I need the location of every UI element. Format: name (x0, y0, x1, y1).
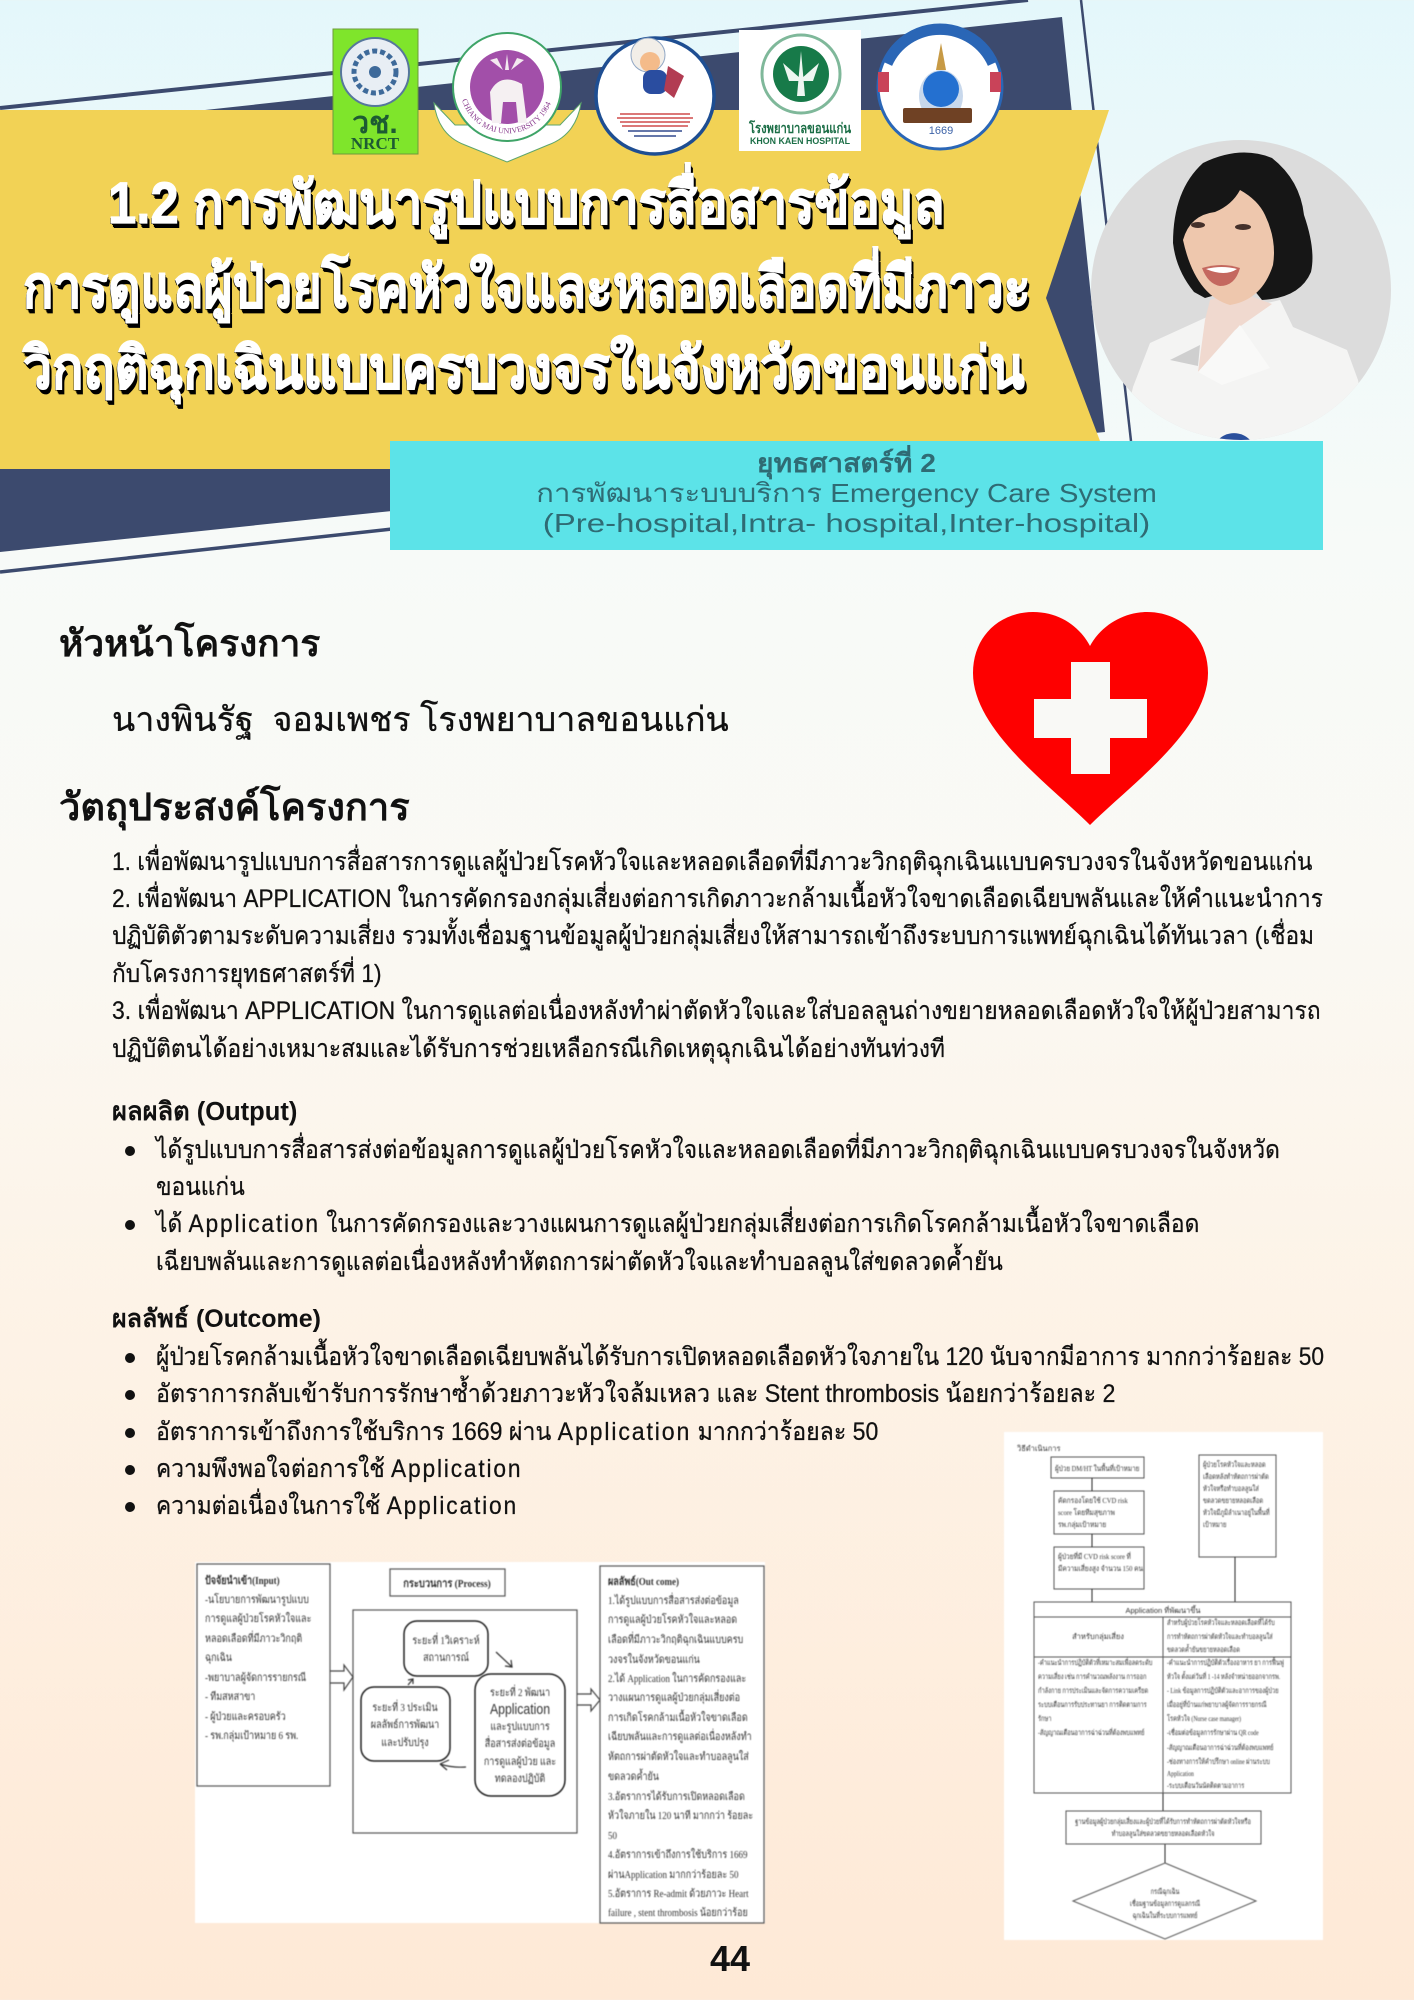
process stages: ทดลองปฏิบัติ (495, 1772, 545, 1785)
methods flowchart image: -ช่องทางการให้คำปรึกษา online ผ่านระบบ (1167, 1757, 1270, 1766)
outcome list: ความต่อเนื่องในการใช้ Application (156, 1492, 518, 1520)
methods flowchart image: ระบบเตือนการรับประทานยา การติดตามการ (1038, 1700, 1147, 1709)
input box: -นโยบายการพัฒนารูปแบบ (205, 1592, 309, 1606)
input box: การดูแลผู้ป่วยโรคหัวใจและ (205, 1611, 311, 1625)
methods flowchart image: ฐานข้อมูลผู้ป่วยกลุ่มเสี่ยงและผู้ป่วยที่ได้รับการทำหัตถการผ่าตัดหัวใจหรือ (1075, 1816, 1251, 1826)
title (22, 162, 1031, 409)
process stages: Application (490, 1701, 550, 1717)
outcome box: หัตถการผ่าตัดหัวใจและทำบอลลูนใส่ (608, 1750, 749, 1763)
outcome box: 5.อัตราการ Re-admit ด้วยภาวะ Heart (608, 1887, 749, 1900)
logo: Khon Kaen EMS foundation: 1669 (929, 125, 953, 137)
outcome list (125, 1338, 1324, 1520)
outcome box: 4.อัตราการเข้าถึงการใช้บริการ 1669 (608, 1848, 747, 1861)
strategy box (390, 441, 1323, 550)
methods flowchart image: คัดกรองโดยใช้ CVD risk (1058, 1496, 1128, 1505)
process stages: สื่อสารส่งต่อข้อมูล (485, 1735, 555, 1750)
input box: ฉุกเฉิน (205, 1651, 232, 1664)
objectives text: ปฏิบัติตนได้อย่างเหมาะสมและได้รับการช่วยเหลือกรณีเกิดเหตุฉุกเฉินได้อย่างทันท่วงที (112, 1035, 945, 1063)
methods flowchart image: รพ.กลุ่มเป้าหมาย (1058, 1521, 1106, 1529)
methods flowchart image: ความเสี่ยง เช่น การคำนวณพลังงาน การออก (1038, 1671, 1146, 1681)
outcome box: 2.ได้ Application ในการคัดกรองและ (608, 1672, 746, 1685)
title: การดูแลผู้ป่วยโรคหัวใจและหลอดเลือดที่มีภาวะ (23, 255, 1031, 320)
outcome list: ผู้ป่วยโรคกล้ามเนื้อหัวใจขาดเลือดเฉียบพลันได้รับการเปิดหลอดเลือดหัวใจภายใน 120 นับจากมีอาการ มากกว่าร้อยละ 50 (156, 1343, 1324, 1371)
methods flowchart image: หัวใจหรือทำบอลลูนใส่ (1203, 1484, 1259, 1493)
process stages: การดูแลผู้ป่วย และ (484, 1755, 556, 1768)
heading: output: ผลผลิต (Output) (112, 1098, 297, 1126)
process stages: และปรับปรุง (381, 1737, 429, 1749)
outcome box: การเกิดโรคกล้ามเนื้อหัวใจขาดเลือด (608, 1709, 748, 1724)
outcome box: เลือดที่มีภาวะวิกฤติฉุกเฉินแบบครบ (608, 1631, 743, 1646)
process stages: ระยะที่ 2 พัฒนา (490, 1684, 550, 1699)
outcome box: หัวใจภายใน 120 นาที มากกว่า ร้อยละ (608, 1809, 753, 1822)
logo: heart mascot (596, 38, 714, 154)
outcome box: ผลลัพธ์(Out come) (608, 1575, 679, 1588)
methods flowchart image: -สัญญาณเตือนอาการฉ่าฉ่วนที่ต้องพบแพทย์ (1167, 1742, 1274, 1752)
methods flowchart image: หัวใจมีภูมิลำเนาอยู่ในพื้นที่ (1203, 1506, 1270, 1517)
methods flowchart image: ทำบอลลูนใส่ขดลวดขยายหลอดเลือดหัวใจ (1112, 1829, 1215, 1838)
process stages: และรูปแบบการ (490, 1721, 550, 1733)
outcome box: failure , stent thrombosis น้อยกว่าร้อย (608, 1906, 748, 1919)
strategy box: การพัฒนาระบบบริการ Emergency Care System (536, 478, 1157, 508)
methods flowchart image: ฉุกเฉินในที่ระบบการแพทย์ (1132, 1910, 1198, 1920)
process label (390, 1569, 505, 1596)
methods flowchart image: -เชื่อมต่อข้อมูลการรักษาผ่าน QR code (1167, 1727, 1259, 1737)
methods flowchart image: เป้าหมาย (1203, 1520, 1226, 1529)
methods flowchart image: โรคหัวใจ (Nurse case manager) (1167, 1714, 1241, 1723)
outcome box: วงจรในจังหวัดขอนแก่น (608, 1653, 700, 1666)
outcome box: 3.อัตราการได้รับการเปิดหลอดเลือด (608, 1790, 745, 1803)
input box: - ทีมสหสาขา (205, 1690, 255, 1703)
methods flowchart image: สำหรับกลุ่มเสี่ยง (1072, 1631, 1124, 1641)
output list: ได้รูปแบบการสื่อสารส่งต่อข้อมูลการดูแลผู้ป่วยโรคหัวใจและหลอดเลือดที่มีภาวะวิกฤติฉุกเฉินแบบครบวงจรในจังหวัด (156, 1136, 1280, 1164)
methods flowchart image: วิธีดำเนินการ (1016, 1444, 1060, 1453)
methods flowchart image: score โดยทีมสุขภาพ (1058, 1508, 1115, 1517)
methods flowchart image: กรณีฉุกเฉิน (1151, 1887, 1180, 1896)
output list: ได้ Application ในการคัดกรองและวางแผนการดูแลผู้ป่วยกลุ่มเสี่ยงต่อการเกิดโรคกล้ามเนื้อหัวใจขาดเลือด (156, 1210, 1199, 1238)
methods flowchart image: Application (1167, 1770, 1194, 1778)
outcome box: เฉียบพลันและการดูแลต่อเนื่องหลังทำ (608, 1728, 752, 1743)
output list: ขอนแก่น (156, 1173, 245, 1201)
objectives text: ปฏิบัติตัวตามระดับความเสี่ยง รวมทั้งเชื่อมฐานข้อมูลผู้ป่วยกลุ่มเสี่ยงให้สามารถเข้าถึงระบบการแพทย์ฉุกเฉินได้ทันเวลา (เชื่อม (112, 922, 1314, 950)
objectives text: 2. เพื่อพัฒนา APPLICATION ในการคัดกรองกลุ่มเสี่ยงต่อการเกิดภาวะกล้ามเนื้อหัวใจขาดเลือดเฉียบพลันและให้คำแนะนำการ (112, 885, 1323, 913)
methods flowchart image: ขดลวดค้ำยันขยายหลอดเลือด (1167, 1644, 1240, 1654)
process stages: ระยะที่ 3 ประเมิน (372, 1699, 438, 1714)
objectives text: 3. เพื่อพัฒนา APPLICATION ในการดูแลต่อเนื่องหลังทำผ่าตัดหัวใจและใส่บอลลูนถ่างขยายหลอดเลือดหัวใจให้ผู้ป่วยสามารถ (112, 997, 1321, 1025)
process label: กระบวนการ (Process) (403, 1578, 491, 1590)
objectives text: 1. เพื่อพัฒนารูปแบบการสื่อสารการดูแลผู้ป่วยโรคหัวใจและหลอดเลือดที่มีภาวะวิกฤติฉุกเฉินแบบครบวงจรในจังหวัดขอนแก่น (112, 848, 1312, 876)
output list (125, 1132, 1280, 1277)
process stages: ผลลัพธ์การพัฒนา (371, 1718, 439, 1731)
outcome box: การดูแลผู้ป่วยโรคหัวใจและหลอด (608, 1612, 737, 1626)
yellow title banner (0, 110, 1109, 469)
outcome box: วางแผนการดูแลผู้ป่วยกลุ่มเสี่ยงต่อ (608, 1689, 740, 1704)
process stages: ระยะที่ 1วิเคราะห์ (412, 1632, 480, 1647)
methods flowchart image: ผู้ป่วย DM/HT ในพื้นที่เป้าหมาย (1055, 1461, 1139, 1473)
methods flowchart image: -คำแนะนำการปฏิบัติตัวเรื่องอาหาร ยา การฟื้นฟู (1167, 1657, 1284, 1667)
page number: 44 (710, 1938, 750, 1979)
methods flowchart image: -คำแนะนำการปฏิบัติตัวที่เหมาะสมเพื่อลดระดับ (1038, 1657, 1152, 1667)
outcome box: ผ่านApplication มากกว่าร้อยละ 50 (608, 1868, 738, 1881)
outcome list: ความพึงพอใจต่อการใช้ Application (156, 1455, 522, 1483)
heading: objectives: วัตถุประสงค์โครงการ (59, 787, 410, 829)
methods flowchart image: เมื่ออยู่ที่บ้านแก่พยาบาลผู้จัดการรายกรณี (1167, 1699, 1267, 1709)
navy diagonal bands behind banner (0, 0, 1131, 572)
methods flowchart image: -ระบบเตือนวันนัดติดตามอาการ (1167, 1781, 1245, 1790)
methods flowchart image: มีความเสี่ยงสูง จำนวน 150 คน (1058, 1564, 1143, 1573)
outcome box: 1.ได้รูปแบบการสื่อสารส่งต่อข้อมูล (608, 1592, 739, 1607)
outcome box: 50 (608, 1830, 617, 1842)
outcome box (600, 1566, 764, 1923)
input box: -พยาบาลผู้จัดการรายกรณี (205, 1671, 306, 1684)
methods flowchart image: รักษา (1038, 1714, 1052, 1723)
arrow: process to outcome (577, 1689, 600, 1711)
objectives text: กับโครงการยุทธศาสตร์ที่ 1) (112, 960, 382, 988)
methods flowchart image (1004, 1432, 1323, 1940)
outcome list: อัตราการกลับเข้ารับการรักษาซ้ำด้วยภาวะหัวใจล้มเหลว และ Stent thrombosis น้อยกว่าร้อยละ 2 (156, 1380, 1115, 1408)
logo: Chiang Mai University (433, 32, 582, 162)
title: 1.2 การพัฒนารูปแบบการสื่อสารข้อมูล (108, 171, 945, 236)
methods flowchart image: Application ที่พัฒนาขึ้น (1125, 1605, 1201, 1615)
methods flowchart image: กำลังกาย การประเมินและจัดการความเครียด (1038, 1686, 1148, 1695)
strategy box: ยุทธศาสตร์ที่ 2 (757, 448, 936, 478)
arrow: input to process (330, 1665, 353, 1690)
logo: Khon Kaen Hospital: KHON KAEN HOSPITAL (750, 136, 850, 147)
methods flowchart image: ผู้ป่วยโรคหัวใจและหลอด (1203, 1459, 1266, 1469)
methods flowchart image: เลือดหลังทำหัตถการผ่าตัด (1203, 1472, 1269, 1481)
logo: Khon Kaen Hospital: โรงพยาบาลขอนแก่น (748, 119, 851, 136)
methods flowchart image: หัวใจ ตั้งแต่วันที่ 1 -14 หลังจำหน่ายออกจากรพ. (1167, 1671, 1280, 1681)
heading: outcome: ผลลัพธ์ (Outcome) (112, 1305, 321, 1333)
logo: NRCT: NRCT (351, 134, 400, 153)
strategy box: (Pre-hospital,Intra- hospital,Inter-hospital) (543, 508, 1150, 538)
methods flowchart image: - Link ข้อมูลการปฏิบัติตัวและอาการของผู้ป่วย (1167, 1686, 1279, 1695)
heading: project leader: หัวหน้าโครงการ (59, 623, 320, 664)
outcome list: อัตราการเข้าถึงการใช้บริการ 1669 ผ่าน Application มากกว่าร้อยละ 50 (156, 1418, 878, 1446)
process stages (353, 1610, 577, 1833)
methods flowchart image: -สัญญาณเตือนอาการฉ่าฉ่วนที่ต้องพบแพทย์ (1038, 1727, 1145, 1737)
output list: เฉียบพลันและการดูแลต่อเนื่องหลังทำหัตถการผ่าตัดหัวใจและทำบอลลูนใส่ขดลวดค้ำยัน (156, 1248, 1003, 1276)
process diagram image (195, 1562, 765, 1923)
logo: Chiang Mai University: CHIANG MAI UNIVERSITY 1964 (462, 99, 551, 134)
process stages: สถานการณ์ (423, 1651, 469, 1664)
objectives text (112, 844, 1323, 1064)
input box: ปัจจัยนำเข้า(Input) (205, 1574, 280, 1587)
methods flowchart image: ขดลวดขยายหลอดเลือด (1203, 1496, 1263, 1505)
logo: Khon Kaen EMS foundation (878, 25, 1002, 149)
methods flowchart image: สำหรับผู้ป่วยโรคหัวใจและหลอดเลือดที่ได้รับ (1167, 1617, 1275, 1627)
logo: Khon Kaen Hospital (739, 30, 861, 151)
input box (197, 1564, 330, 1786)
title: วิกฤติฉุกเฉินแบบครบวงจรในจังหวัดขอนแก่น (23, 336, 1025, 401)
methods flowchart image: เชื่อมฐานข้อมูลการดูแลกรณี (1130, 1898, 1200, 1908)
input box: - รพ.กลุ่มเป้าหมาย 6 รพ. (205, 1729, 298, 1742)
methods flowchart image: ผู้ป่วยที่มี CVD risk score ที่ (1058, 1552, 1131, 1561)
portrait photo (1090, 139, 1392, 445)
leader name: นางพินรัฐ จอมเพชร โรงพยาบาลขอนแก่น (112, 701, 729, 739)
logo: NRCT: วช. (352, 107, 398, 140)
methods flowchart image: การทำหัตถการผ่าตัดหัวใจและทำบอลลูนใส่ (1167, 1632, 1273, 1641)
input box: หลอดเลือดที่มีภาวะวิกฤติ (205, 1630, 302, 1645)
input box: - ผู้ป่วยและครอบครัว (205, 1710, 286, 1723)
outcome box: ขดลวดค้ำยัน (608, 1768, 659, 1783)
logo: NRCT (333, 29, 418, 154)
icon: red heart with white cross (973, 612, 1208, 825)
